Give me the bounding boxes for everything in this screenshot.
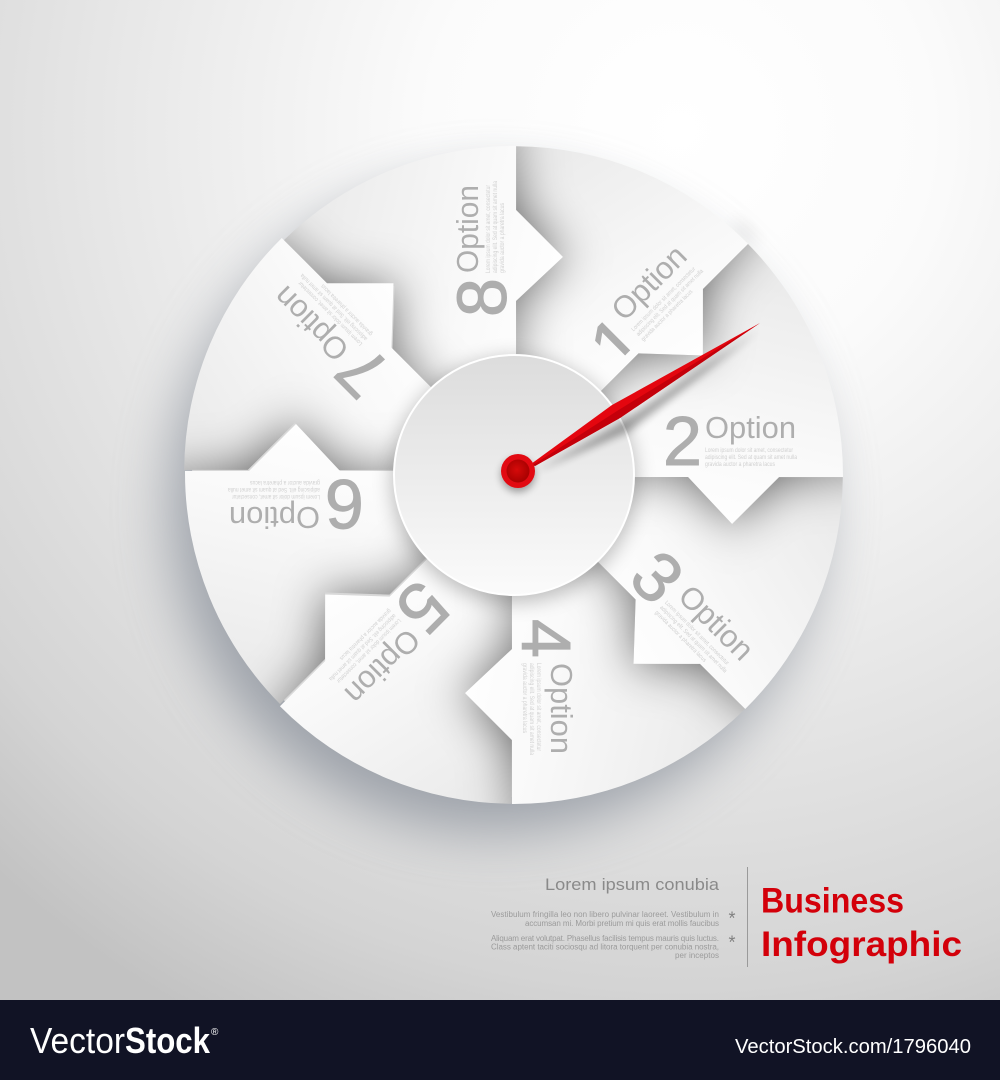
segment 3 bbox=[598, 477, 843, 709]
label: option 3 bbox=[616, 536, 769, 689]
title: Business bbox=[761, 882, 904, 920]
base disc bbox=[192, 153, 836, 797]
label: option 1: 1 bbox=[575, 302, 657, 384]
label: option 5: gravida auctor a pharetra lacus bbox=[338, 607, 392, 661]
label: option 6: Option bbox=[229, 500, 320, 535]
divider bbox=[747, 867, 748, 967]
label: option 2: Option bbox=[705, 410, 796, 445]
needle pivot bbox=[501, 454, 535, 492]
label: option 4: Lorem ipsum dolor sit amet, consectetur bbox=[535, 663, 541, 751]
segment 5 bbox=[280, 559, 512, 804]
label: option 3: adipiscing elit. Sed at quam sit amet nulla bbox=[658, 605, 728, 675]
label: option 3: gravida auctor a pharetra lacus bbox=[653, 610, 707, 664]
label: option 2: gravida auctor a pharetra lacus bbox=[705, 462, 775, 468]
bullet asterisk 1: * bbox=[728, 908, 736, 928]
bullet asterisk 2: * bbox=[728, 932, 736, 952]
centre dial bbox=[394, 355, 634, 595]
footer logo: Vector bbox=[30, 1020, 125, 1061]
title: Infographic bbox=[761, 925, 962, 964]
label: option 8: adipiscing elit. Sed at quam sit amet nulla bbox=[493, 180, 499, 273]
caption text 1: accumsan mi. Morbi pretium mi quis erat mollis faucibus bbox=[525, 919, 719, 928]
footer logo bbox=[30, 1020, 219, 1061]
label: option 8: Lorem ipsum dolor sit amet, consectetur bbox=[486, 185, 492, 273]
caption text 1 bbox=[491, 910, 719, 928]
caption block bbox=[491, 875, 736, 960]
label: option 1: adipiscing elit. Sed at quam sit amet nulla bbox=[636, 268, 705, 338]
label: option 2: Lorem ipsum dolor sit amet, consectetur bbox=[705, 448, 793, 454]
label: option 3: 3 bbox=[616, 536, 699, 618]
needle shadow bbox=[535, 330, 760, 472]
footer logo: ® bbox=[211, 1027, 219, 1038]
label: option 4 bbox=[507, 619, 585, 756]
label: option 2: adipiscing elit. Sed at quam sit amet nulla bbox=[705, 455, 798, 461]
label: option 7: Lorem ipsum dolor sit amet, consectetur bbox=[298, 280, 364, 346]
caption text 2: per inceptos bbox=[675, 951, 719, 960]
segment 2 bbox=[601, 244, 843, 524]
label: option 2 bbox=[663, 402, 798, 480]
label: option 8: Option bbox=[450, 185, 485, 273]
segment 8 bbox=[284, 150, 563, 387]
label: option 8: 8 bbox=[443, 278, 521, 317]
title bbox=[761, 882, 962, 964]
label: option 1: gravida auctor a pharetra lacus bbox=[641, 289, 694, 343]
footer url: VectorStock.com/1796040 bbox=[735, 1036, 971, 1058]
label: option 3: Lorem ipsum dolor sit amet, consectetur bbox=[663, 600, 730, 667]
label: option 6: adipiscing elit. Sed at quam sit amet nulla bbox=[227, 486, 320, 492]
caption text 1: Vestibulum fringilla leo non libero pulvinar laoreet. Vestibulum in bbox=[491, 910, 719, 919]
arrow corner shadow on background bbox=[730, 217, 760, 247]
label: option 6: Lorem ipsum dolor sit amet, consectetur bbox=[232, 493, 320, 499]
label: option 6 bbox=[227, 465, 364, 543]
disc drop shadow bbox=[170, 179, 822, 831]
label: option 1: Lorem ipsum dolor sit amet, consectetur bbox=[631, 266, 697, 333]
label: option 7: 7 bbox=[321, 330, 404, 413]
centre dial shadow bbox=[392, 358, 636, 602]
label: option 7: gravida auctor a pharetra lacus bbox=[320, 283, 374, 336]
label: option 1 bbox=[595, 249, 704, 356]
label: option 6: 6 bbox=[325, 465, 364, 543]
label: option 5 bbox=[312, 566, 464, 718]
label: option 6: gravida auctor a pharetra lacus bbox=[250, 479, 320, 485]
label: option 4: Option bbox=[544, 663, 579, 754]
label: option 2: 2 bbox=[663, 402, 702, 480]
label: option 8: gravida auctor a pharetra lacus bbox=[500, 203, 506, 273]
label: option 4: gravida auctor a pharetra lacus bbox=[521, 663, 527, 733]
label: option 3: Option bbox=[672, 578, 761, 667]
footer bar bbox=[0, 1000, 1000, 1080]
label: option 1: Option bbox=[605, 238, 694, 327]
caption text 2: Aliquam erat volutpat. Phasellus facilisis tempus mauris quis luctus. bbox=[491, 934, 719, 943]
segment 7 bbox=[184, 238, 431, 470]
label: option 5: 5 bbox=[381, 566, 464, 649]
label: option 7: Option bbox=[267, 279, 356, 368]
segment 6 bbox=[185, 424, 426, 704]
label: option 8 bbox=[443, 180, 521, 317]
label: option 5: adipiscing elit. Sed at quam sit amet nulla bbox=[327, 612, 397, 682]
segment 1 bbox=[516, 146, 748, 391]
caption heading: Lorem ipsum conubia bbox=[545, 875, 720, 894]
needle bbox=[531, 323, 760, 466]
label: option 5: Lorem ipsum dolor sit amet, consectetur bbox=[335, 617, 402, 684]
caption text 2 bbox=[491, 934, 719, 960]
footer logo: Stock bbox=[125, 1020, 211, 1061]
label: option 4: adipiscing elit. Sed at quam sit amet nulla bbox=[528, 663, 534, 756]
segment 4 bbox=[465, 562, 740, 804]
label: option 5: Option bbox=[338, 622, 427, 711]
label: option 7 bbox=[253, 262, 404, 413]
caption text 2: Class aptent taciti sociosqu ad litora torquent per conubia nostra, bbox=[491, 942, 719, 952]
label: option 4: 4 bbox=[507, 619, 585, 658]
label: option 7: adipiscing elit. Sed at quam sit amet nulla bbox=[299, 272, 369, 341]
